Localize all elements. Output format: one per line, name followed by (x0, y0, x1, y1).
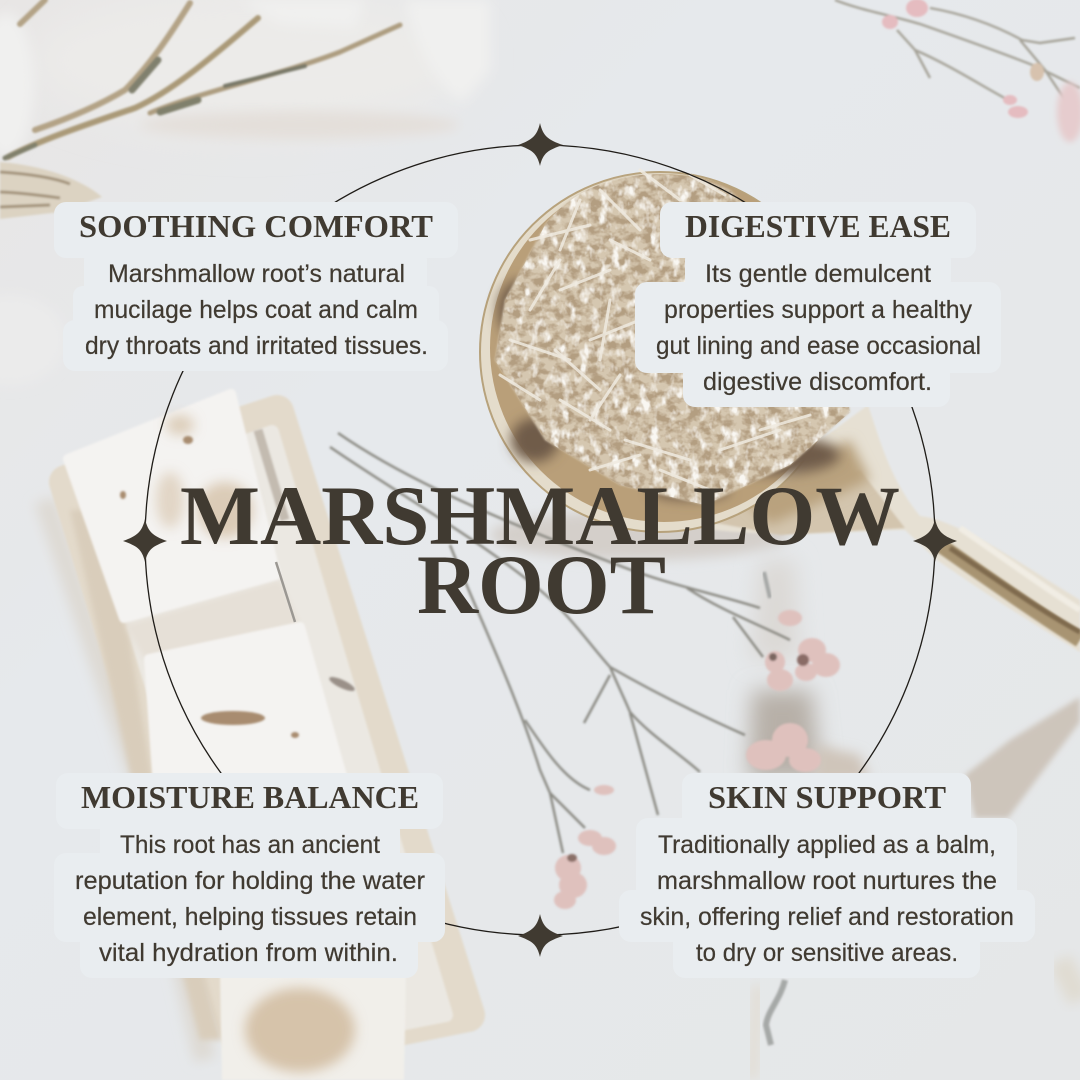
heading: skin support: SKIN SUPPORT (708, 779, 946, 815)
text: skin support description: marshmallow root nurtures the (657, 867, 997, 895)
gold spoon with shredded root (480, 170, 1080, 652)
text: moisture balance description: vital hydration from within. (99, 939, 398, 967)
branch top right with pink buds (835, 0, 1080, 142)
text: moisture balance description: reputation for holding the water (75, 867, 425, 895)
icon: four-point star top (518, 123, 563, 166)
text: skin support description (640, 831, 1014, 967)
gold spoon left edge (0, 162, 102, 219)
text: digestive ease description: Its gentle demulcent (705, 260, 931, 288)
heading: moisture balance: MOISTURE BALANCE (81, 779, 419, 815)
text: soothing comfort description: Marshmallow root’s natural (108, 260, 405, 288)
title (180, 469, 900, 632)
white flowers top left (0, 0, 490, 385)
title: ROOT (417, 538, 666, 632)
text: digestive ease description: properties support a healthy (664, 296, 972, 324)
text: digestive ease description: digestive discomfort. (703, 368, 932, 396)
panel: moisture balance (54, 773, 445, 978)
icon: four-point star right (913, 519, 957, 562)
icon: four-point star left (123, 519, 167, 562)
twigs with pink flowers (330, 433, 840, 909)
text: digestive ease description: gut lining and ease occasional (656, 332, 981, 360)
text: skin support description: Traditionally applied as a balm, (658, 831, 996, 859)
panel: digestive ease (635, 202, 1001, 407)
text: digestive ease description (656, 260, 981, 396)
circle outline (145, 145, 935, 935)
text: skin support description: to dry or sensitive areas. (696, 939, 958, 967)
heading: digestive ease: DIGESTIVE EASE (685, 208, 951, 244)
branches top left (5, 0, 400, 158)
text: moisture balance description: element, helping tissues retain (83, 903, 417, 931)
icon: four-point star bottom (518, 914, 563, 957)
text: moisture balance description (75, 831, 425, 967)
text: soothing comfort description (85, 260, 428, 360)
text: soothing comfort description: mucilage helps coat and calm (94, 296, 418, 324)
tray with marshmallows (45, 394, 468, 1080)
marble veins (748, 560, 1080, 1080)
panel: soothing comfort (54, 202, 458, 371)
text: moisture balance description: This root has an ancient (120, 831, 380, 859)
text: soothing comfort description: dry throats and irritated tissues. (85, 332, 428, 360)
text: skin support description: skin, offering relief and restoration (640, 903, 1014, 931)
title: MARSHMALLOW (180, 469, 900, 563)
heading: soothing comfort: SOOTHING COMFORT (79, 208, 433, 244)
panel: skin support (619, 773, 1035, 978)
